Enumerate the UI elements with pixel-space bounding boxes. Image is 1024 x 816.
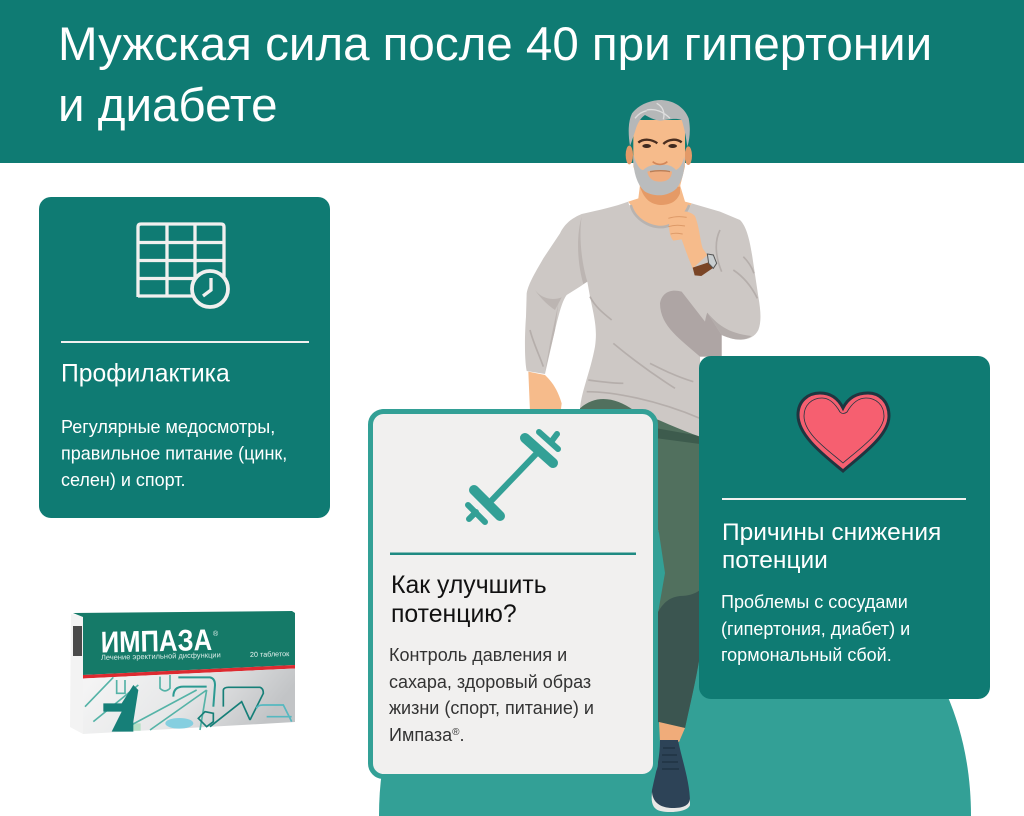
divider [390, 552, 636, 555]
teal background semicircle [379, 530, 971, 816]
heading: потенции [722, 547, 828, 574]
body text: правильное питание (цинк, [61, 444, 287, 464]
header band [0, 0, 1024, 163]
body text: сахара, здоровый образ [389, 672, 591, 692]
heading: Профилактика [61, 360, 230, 388]
body text: (гипертония, диабет) и [721, 619, 910, 639]
eyes and brows [638, 140, 682, 144]
box tablet count: 20 таблеток [250, 649, 290, 659]
body text: . [460, 725, 465, 745]
body text: Проблемы с сосудами [721, 592, 908, 612]
icon: heart [798, 393, 889, 471]
body text: Контроль давления и [389, 645, 567, 665]
product box: Impaza [70, 611, 295, 734]
body text: ® [452, 727, 460, 738]
ankle [659, 722, 685, 742]
sweater shadows [660, 291, 722, 357]
divider [61, 341, 309, 343]
box green face [73, 611, 295, 675]
right hand and watch [668, 211, 717, 276]
pants [580, 398, 700, 728]
divider [722, 498, 966, 500]
body text: Регулярные медосмотры, [61, 417, 275, 437]
product box: Impaza: ® [213, 630, 219, 638]
running figure on box [103, 685, 138, 732]
panel: how to improve [370, 412, 656, 776]
beard [633, 155, 685, 195]
panel: causes [699, 356, 990, 699]
arrows pattern [85, 675, 292, 732]
illustration: man running [525, 100, 760, 812]
heading: потенцию? [391, 601, 517, 628]
box lower face [83, 668, 295, 734]
title: Мужская сила после 40 при гипертонии [58, 18, 932, 71]
hair [629, 100, 690, 147]
box subtitle: Лечение эректильной дисфункции [101, 650, 221, 662]
head [626, 100, 692, 195]
icon: barbell [468, 432, 558, 522]
neck [628, 185, 692, 230]
body text: гормональный сбой. [721, 645, 892, 665]
heading: Как улучшить [391, 572, 547, 599]
body text: Импаза [389, 725, 465, 745]
icon: table with clock [138, 224, 228, 307]
heading: Причины снижения [722, 519, 941, 546]
shoe [652, 740, 690, 812]
box side [70, 614, 83, 734]
collar [631, 205, 689, 227]
QR code [73, 626, 82, 656]
box brand name: ИМПАЗА [100, 623, 212, 659]
body text: жизни (спорт, питание) и [389, 698, 594, 718]
left hand [528, 372, 562, 412]
title: и диабете [58, 79, 278, 132]
lower leg [658, 590, 700, 728]
waistband [655, 428, 700, 444]
sweater [525, 202, 760, 437]
red stripe [83, 665, 295, 678]
panel: prevention [39, 197, 330, 518]
body text: селен) и спорт. [61, 470, 186, 490]
